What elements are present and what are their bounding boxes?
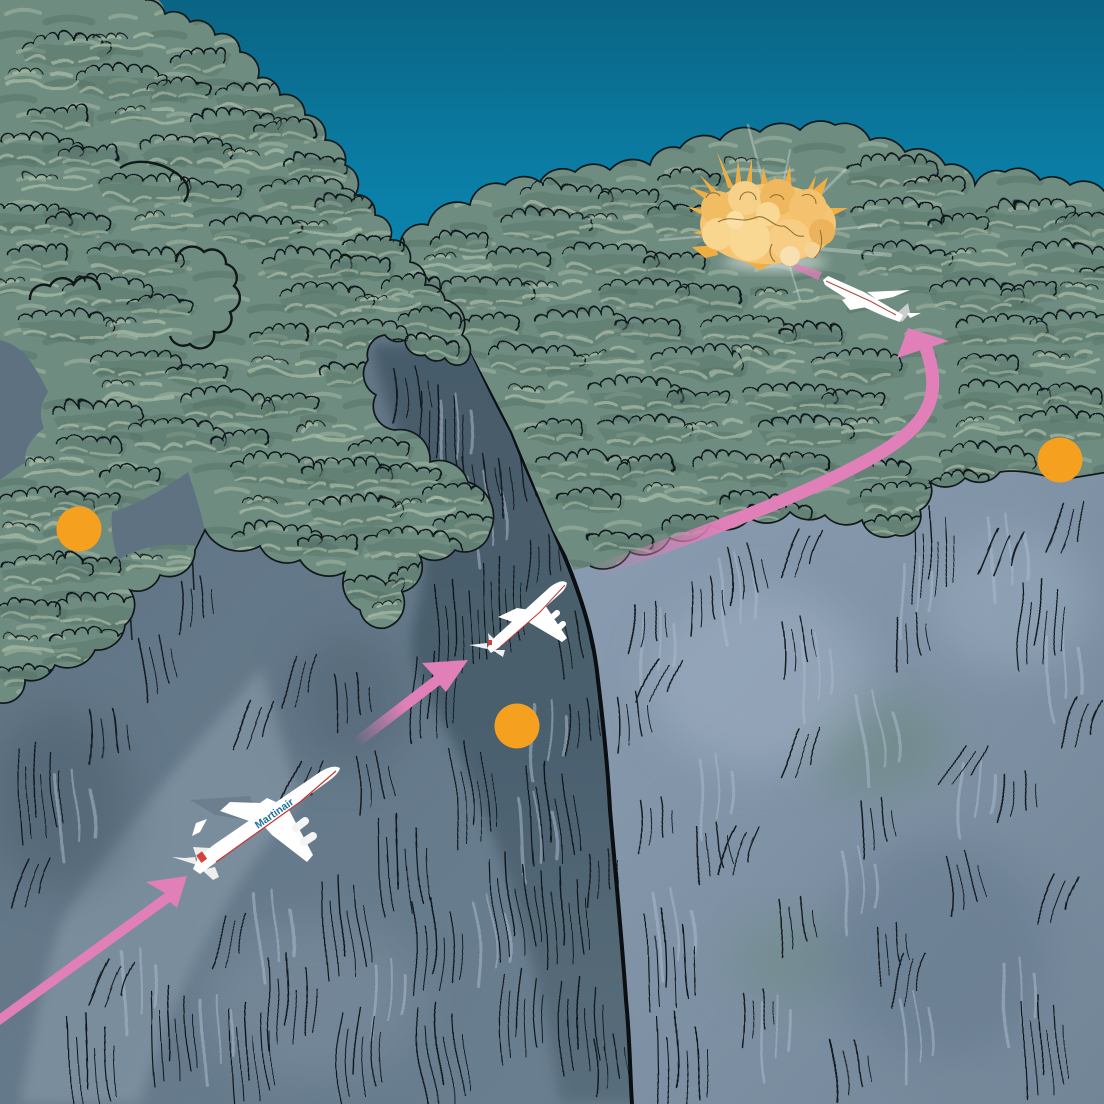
white blast rays — [660, 125, 890, 300]
cheatline — [826, 281, 896, 315]
lower wing — [264, 808, 313, 862]
cheatline — [500, 585, 565, 647]
canopy foliage texture — [0, 0, 1104, 720]
canopy outline: right tree mass — [400, 121, 1104, 569]
flame spikes — [687, 152, 848, 270]
ghost pink trail — [790, 262, 822, 280]
light strokes on rock — [60, 394, 1085, 1084]
canopy: base colour of both tree masses — [0, 0, 1104, 720]
airline name: Martinair — [253, 796, 296, 831]
fuselage — [487, 581, 567, 653]
rock gap at left edge of canopy — [0, 340, 48, 480]
engines — [296, 821, 313, 842]
sky — [0, 0, 1104, 300]
large scalloped tree crown outline — [30, 162, 240, 348]
plane: large Martinair jet, first leg — [172, 767, 340, 880]
arrow: third flight leg, curving up to the explosion — [592, 328, 949, 572]
plane: second leg — [469, 581, 567, 657]
tail — [469, 633, 505, 657]
fireball ink lines — [706, 192, 822, 262]
orange marker: right — [1038, 438, 1082, 482]
rock face: right of chasm — [550, 470, 1104, 1104]
rock gap between trees — [112, 472, 205, 560]
fuselage — [193, 767, 340, 874]
fuselage — [823, 276, 903, 322]
chasm: dark gully — [372, 335, 650, 1104]
rock face: left of chasm — [0, 330, 640, 1104]
wings — [842, 290, 910, 310]
wreck fragment — [192, 819, 207, 836]
drop shadow — [190, 796, 260, 822]
tail fin — [897, 303, 910, 322]
tree trunks — [80, 470, 194, 650]
engines — [550, 613, 563, 630]
tailplane — [907, 313, 921, 318]
arrow: first flight leg — [0, 876, 187, 1025]
tail logo — [196, 851, 207, 863]
upper wing — [220, 798, 276, 822]
arrow: second flight leg — [355, 660, 468, 748]
cheatline — [216, 771, 336, 862]
orange marker: centre — [494, 704, 540, 748]
dark hatch strokes on rock — [10, 366, 1102, 1104]
canopy outline: left tree mass — [0, 0, 494, 703]
explosion — [660, 125, 890, 300]
wings — [498, 605, 567, 642]
chasm ridge line — [462, 330, 632, 1104]
orange marker: left — [56, 506, 102, 552]
tail — [172, 847, 219, 880]
plane: third leg, about to hit the fireball — [823, 276, 921, 322]
tail logo — [488, 640, 492, 645]
rock shading — [0, 530, 1090, 1104]
fireball clouds — [700, 184, 836, 264]
